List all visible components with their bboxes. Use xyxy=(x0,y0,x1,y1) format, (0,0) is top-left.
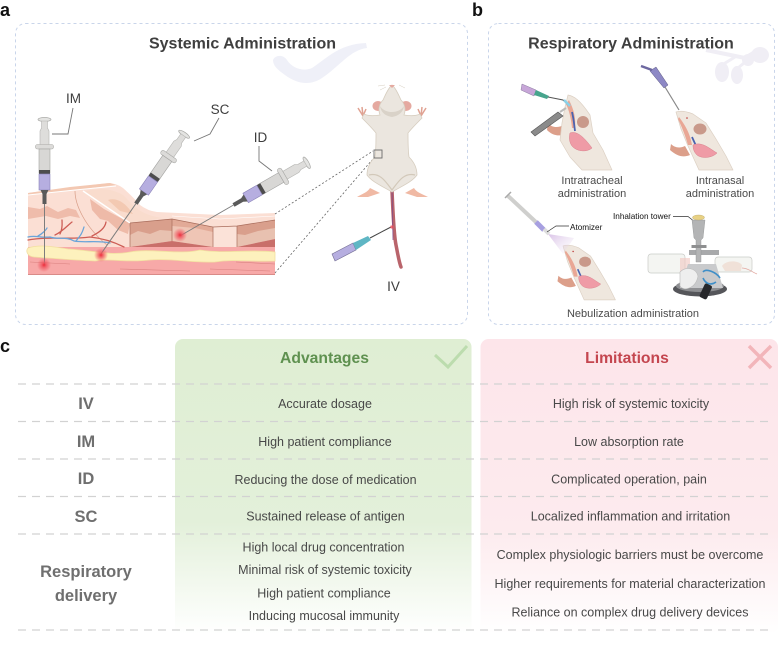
panel: respiratory administration xyxy=(488,24,774,324)
panel: comparison table xyxy=(18,339,778,634)
limitations list: Reliance on complex drug delivery devices xyxy=(512,606,748,620)
skin cross-section xyxy=(27,183,275,275)
label: inhalation tower: Inhalation tower xyxy=(613,212,671,221)
label: intratracheal xyxy=(558,175,626,200)
row: ID: Complicated operation, pain xyxy=(551,472,707,486)
label: ID: ID xyxy=(254,130,268,145)
syringe: SC xyxy=(94,127,193,259)
injection sites xyxy=(37,228,187,272)
limitations list: Complex physiologic barriers must be overcome xyxy=(497,548,763,562)
row: ID: ID xyxy=(78,470,94,488)
panel label b: b xyxy=(472,0,483,20)
label: SC: SC xyxy=(211,102,230,117)
syringe: IV xyxy=(332,224,394,261)
label: atomizer: Atomizer xyxy=(570,223,603,232)
label: intranasal: administration xyxy=(686,188,754,200)
syringe: ID xyxy=(176,154,313,243)
row: IM: High patient compliance xyxy=(258,435,392,449)
limitations list xyxy=(495,548,766,620)
label: inhalation tower xyxy=(613,212,695,222)
label: atomizer xyxy=(547,223,603,232)
advantages list: High patient compliance xyxy=(257,586,391,600)
row: ID: Reducing the dose of medication xyxy=(234,473,417,487)
advantages list: High local drug concentration xyxy=(243,540,404,554)
column: advantages background xyxy=(175,339,472,634)
row: SC: Sustained release of antigen xyxy=(246,510,405,524)
row: IV xyxy=(78,395,710,413)
row: IV: Accurate dosage xyxy=(278,397,372,411)
mouse, top view xyxy=(357,85,428,267)
row: SC: SC xyxy=(75,508,98,526)
panel: systemic administration xyxy=(16,24,468,324)
label: intranasal: Intranasal xyxy=(696,175,744,187)
illustration: atomizer and mouse xyxy=(505,192,615,300)
label: respiratory delivery: Respiratory xyxy=(40,563,133,581)
row: SC xyxy=(75,508,730,526)
illustration: intratracheal mouse xyxy=(521,84,612,170)
watermark: vessel xyxy=(273,43,367,83)
row: IV: IV xyxy=(78,395,94,413)
row: ID xyxy=(78,470,707,488)
watermark: lung xyxy=(706,47,769,84)
advantages list: Inducing mucosal immunity xyxy=(249,609,400,623)
syringe: IM xyxy=(36,118,54,265)
row: IV: High risk of systemic toxicity xyxy=(553,397,710,411)
heading: systemic administration: Systemic Administration xyxy=(149,36,336,52)
panel label c: c xyxy=(0,336,10,356)
zoom indicator xyxy=(275,151,373,273)
label: ID xyxy=(254,130,272,171)
row: IM: IM xyxy=(77,433,95,451)
heading: limitations: Limitations xyxy=(585,350,669,367)
illustration: intranasal mouse xyxy=(641,66,733,170)
icon: check mark xyxy=(435,346,467,367)
heading: respiratory administration: Respiratory Administration xyxy=(528,36,734,52)
label: IM xyxy=(52,91,81,134)
row: IM: Low absorption rate xyxy=(574,435,684,449)
label: intratracheal: Intratracheal xyxy=(561,175,623,187)
advantages list: Minimal risk of systemic toxicity xyxy=(238,563,413,577)
column: limitations background xyxy=(480,339,778,634)
label: intranasal xyxy=(686,175,754,200)
advantages list xyxy=(238,540,413,623)
blood vessels xyxy=(28,220,124,247)
panel label a: a xyxy=(0,0,11,20)
row: IM xyxy=(77,433,684,451)
heading: advantages: Advantages xyxy=(280,350,369,367)
row: respiratory delivery xyxy=(40,540,766,623)
icon: cross mark xyxy=(749,346,771,368)
label: respiratory delivery xyxy=(40,563,133,605)
label: IM: IM xyxy=(66,91,81,106)
limitations list: Higher requirements for material characterization xyxy=(495,577,766,591)
label: IV: IV xyxy=(387,279,400,294)
label: respiratory delivery: delivery xyxy=(55,587,118,605)
label: nebulization: Nebulization administration xyxy=(567,308,699,320)
row: SC: Localized inflammation and irritation xyxy=(531,510,730,524)
illustration: inhalation tower device xyxy=(648,215,757,300)
label: SC xyxy=(194,102,230,141)
label: intratracheal: administration xyxy=(558,188,626,200)
